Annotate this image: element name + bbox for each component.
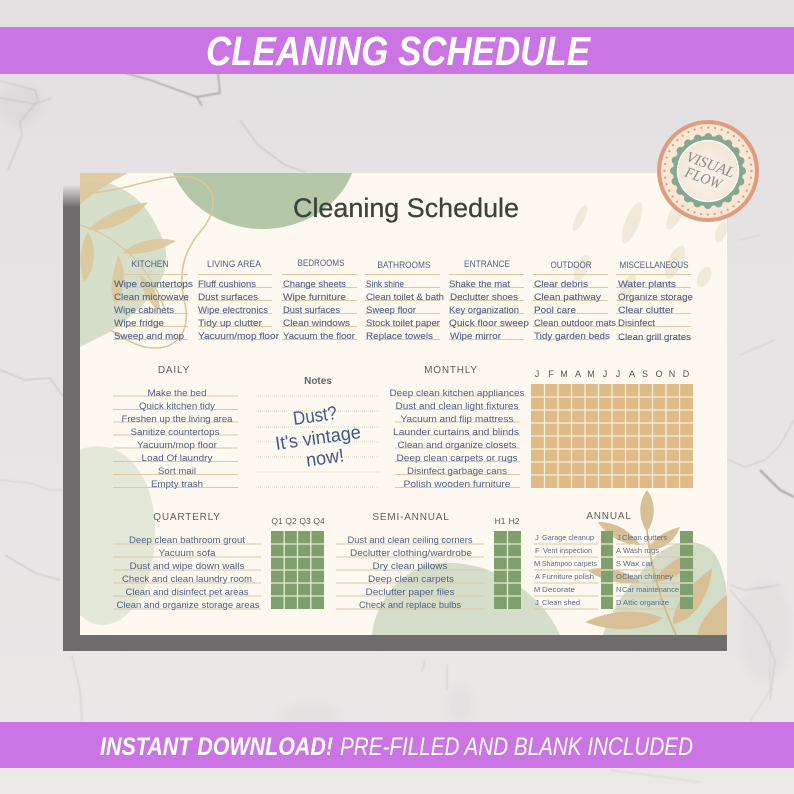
badge: visual flow: VISUAL: [684, 149, 736, 181]
list: living area: Fluff cushions: [198, 279, 256, 290]
chart: quarterly checklist grid: Q4: [313, 516, 325, 526]
list: bedrooms: [283, 258, 355, 342]
decorative shapes: [80, 173, 729, 635]
annual right column: Wash rugs: [623, 546, 659, 555]
list: outdoor: Clean pathway: [534, 292, 601, 303]
annual left column: Garage cleanup: [542, 533, 594, 542]
chart: monthly checklist grid: A: [575, 369, 581, 379]
panel: daily: Quick kitchen tidy: [139, 401, 215, 412]
annual right column: Attic organize: [623, 598, 669, 607]
list: outdoor: Tidy garden beds: [534, 331, 610, 342]
list: miscellaneous: Clean grill grates: [618, 332, 691, 343]
list: kitchen: Wipe countertops: [114, 279, 193, 290]
annual left column: Shampoo carpets: [542, 559, 597, 568]
list: bathrooms: Clean toilet & bath: [366, 292, 444, 303]
panel: notes: Notes: [304, 376, 332, 387]
annual right column: O: [616, 572, 622, 581]
annual left column: Decorate: [542, 585, 575, 594]
annual right column: N: [616, 585, 621, 594]
chart: monthly checklist grid: A: [629, 369, 635, 379]
list: miscellaneous: Clear clutter: [618, 305, 674, 316]
list: bathrooms: BATHROOMS: [378, 260, 430, 270]
list: kitchen: [114, 259, 193, 342]
list: bedrooms: BEDROOMS: [298, 258, 344, 268]
list: bathrooms: [366, 260, 444, 342]
top banner: [0, 27, 794, 74]
badge: visual flow: FLOW: [682, 164, 725, 193]
chart: monthly checklist grid: O: [655, 369, 663, 379]
annual right column: J: [617, 533, 621, 542]
panel: annual: ANNUAL: [586, 511, 632, 522]
chart: semi-annual checklist grid: [494, 516, 521, 609]
chart: monthly checklist grid: M: [587, 369, 595, 379]
chart: monthly checklist grid: N: [669, 369, 675, 379]
annual left column: M: [534, 559, 540, 568]
list: bathrooms: Sweep floor: [366, 305, 416, 316]
list: bedrooms: Wipe furniture: [283, 292, 346, 303]
column lines: [113, 274, 691, 340]
panel: weekly room lists: [113, 258, 693, 343]
panel: quarterly: QUARTERLY: [153, 512, 221, 523]
panel: daily: Freshen up the living area: [122, 414, 233, 425]
list: entrance: Wipe mirror: [450, 331, 501, 342]
list: outdoor: Clean outdoor mats: [534, 318, 616, 329]
panel: semi-annual: Dry clean pillows: [372, 561, 448, 572]
panel: semi-annual: Check and replace bulbs: [359, 600, 461, 611]
list: kitchen: KITCHEN: [132, 259, 168, 269]
annual right column: Wax car: [623, 559, 654, 568]
panel: quarterly: Dust and wipe down walls: [130, 561, 245, 572]
annual right grid: [680, 531, 693, 609]
annual left column: M: [534, 585, 540, 594]
panel: monthly: Dust and clean light fixtures: [396, 401, 519, 412]
chart: quarterly checklist grid: Q3: [299, 516, 311, 526]
list: entrance: Key organization: [449, 305, 519, 316]
panel: daily: Load Of laundry: [142, 453, 213, 464]
chart: quarterly checklist grid: Q2: [285, 516, 297, 526]
panel: semi-annual: Declutter paper files: [366, 587, 455, 598]
panel: monthly: Deep clean kitchen appliances: [390, 388, 525, 399]
list: bathrooms: Sink shine: [366, 279, 404, 290]
list: entrance: [449, 259, 529, 342]
list: living area: Yacuum/mop floor: [198, 331, 279, 342]
handwritten note: now!: [305, 445, 345, 472]
annual left column: J: [535, 598, 539, 607]
panel: monthly: Deep clean carpets or rugs: [396, 453, 518, 464]
panel: quarterly: Yacuum sofa: [158, 548, 216, 559]
list: living area: Wipe electronics: [198, 305, 268, 316]
panel: monthly: Disinfect garbage cans: [407, 466, 507, 477]
panel: monthly: [390, 365, 525, 490]
panel: quarterly: Clean and organize storage areas: [116, 600, 260, 611]
panel: quarterly: Check and clean laundry room: [122, 574, 252, 585]
annual right column: D: [616, 598, 622, 607]
list: living area: [198, 259, 279, 342]
annual left column: A: [535, 572, 540, 581]
chart: quarterly checklist grid: [271, 516, 325, 609]
handwritten note: It's vintage: [274, 422, 362, 455]
handwritten note: Dust?: [292, 403, 338, 430]
list: outdoor: Pool care: [534, 305, 576, 316]
panel: semi-annual: Deep clean carpets: [368, 574, 454, 585]
panel: quarterly: [113, 512, 261, 611]
annual left column: F: [535, 546, 540, 555]
panel: daily: Sanitize countertops: [130, 427, 220, 438]
chart: monthly checklist grid: [531, 369, 693, 488]
panel: monthly: Yacuum and flip mattress: [400, 414, 514, 425]
list: living area: Tidy up clutter: [198, 318, 262, 329]
list: living area: Dust surfaces: [198, 292, 258, 303]
panel: semi-annual: SEMI-ANNUAL: [372, 512, 450, 523]
chart: monthly checklist grid: J: [616, 369, 620, 379]
list: miscellaneous: Disinfect: [618, 318, 655, 329]
bottom banner: PRE-FILLED AND BLANK INCLUDED: [340, 733, 693, 761]
list: outdoor: [534, 260, 616, 342]
panel: monthly: Clean and organize closets: [398, 440, 517, 451]
panel: semi-annual: Declutter clothing/wardrobe: [350, 548, 472, 559]
chart: monthly checklist grid: D: [683, 369, 690, 379]
list: kitchen: Wipe cabinets: [114, 305, 174, 316]
annual left column: J: [535, 533, 539, 542]
list: entrance: Shake the mat: [449, 279, 510, 290]
list: bedrooms: Clean windows: [283, 318, 350, 329]
title: Cleaning Schedule: [293, 193, 519, 223]
list: entrance: Quick floor sweep: [449, 318, 529, 329]
list: bedrooms: Change sheets: [283, 279, 346, 290]
panel: quarterly: Clean and disinfect pet areas: [126, 587, 249, 598]
panel: semi-annual: Dust and clean ceiling corners: [348, 535, 473, 546]
list: bedrooms: Yacuum the floor: [283, 331, 355, 342]
handwritten note: [274, 403, 362, 472]
list: living area: LIVING AREA: [207, 259, 261, 269]
paper shadow: [63, 185, 727, 651]
panel: daily: Sort mail: [158, 466, 196, 477]
bottom banner: [0, 722, 794, 768]
chart: monthly checklist grid: M: [560, 369, 568, 379]
annual left column: Clean shed: [542, 598, 580, 607]
list: miscellaneous: MISCELLANEOUS: [620, 260, 688, 270]
annual right column: Car maintenance: [622, 585, 679, 594]
chart: monthly checklist grid: J: [535, 369, 539, 379]
list: bathrooms: Replace towels: [366, 331, 433, 342]
chart: monthly checklist grid: S: [642, 369, 648, 379]
chart: monthly checklist grid: J: [603, 369, 607, 379]
list: kitchen: Clean microwave: [114, 292, 189, 303]
panel: daily: DAILY: [158, 365, 190, 376]
annual right column: A: [616, 546, 621, 555]
panel: annual: [534, 511, 693, 609]
panel: daily: [113, 365, 238, 490]
list: miscellaneous: [618, 260, 693, 343]
panel: quarterly: Deep clean bathroom grout: [129, 535, 245, 546]
list: entrance: Declutter shoes: [450, 292, 518, 303]
list: bedrooms: Dust surfaces: [283, 305, 340, 316]
top banner: CLEANING SCHEDULE: [206, 28, 591, 74]
list: miscellaneous: Organize storage: [618, 292, 693, 303]
panel: notes: [256, 376, 380, 487]
annual right column: S: [616, 559, 621, 568]
annual left column: Furniture polish: [542, 572, 594, 581]
badge: visual flow: [657, 120, 759, 222]
chart: semi-annual checklist grid: H1: [495, 516, 506, 526]
annual right column: Clean chimney: [622, 572, 673, 581]
panel: monthly: Launder curtains and blinds: [393, 427, 519, 438]
list: outdoor: Clear debris: [534, 279, 588, 290]
list: miscellaneous: Water plants: [618, 279, 676, 290]
bottom banner: INSTANT DOWNLOAD!: [100, 733, 333, 761]
list: kitchen: Sweep and mop: [114, 331, 184, 342]
list: outdoor: OUTDOOR: [550, 260, 592, 270]
chart: quarterly checklist grid: Q1: [271, 516, 283, 526]
chart: monthly checklist grid: F: [548, 369, 554, 379]
panel: daily: Yacuum/mop floor: [137, 440, 217, 451]
paper sheet: [80, 173, 727, 635]
annual left column: Vent inspection: [543, 546, 592, 555]
panel: semi-annual: [336, 512, 484, 611]
annual right column: Clean gutters: [622, 533, 667, 542]
annual left grid: [601, 531, 613, 609]
list: kitchen: Wipe fridge: [114, 318, 164, 329]
annual right column: [616, 533, 679, 607]
chart: semi-annual checklist grid: H2: [509, 516, 520, 526]
panel: monthly: MONTHLY: [424, 365, 478, 376]
list: entrance: ENTRANCE: [464, 259, 510, 269]
panel: daily: Empty trash: [151, 479, 203, 490]
list: bathrooms: Stock toilet paper: [366, 318, 440, 329]
annual left column: [534, 533, 597, 607]
panel: daily: Make the bed: [148, 388, 206, 399]
panel: monthly: Polish wooden furniture: [404, 479, 510, 490]
